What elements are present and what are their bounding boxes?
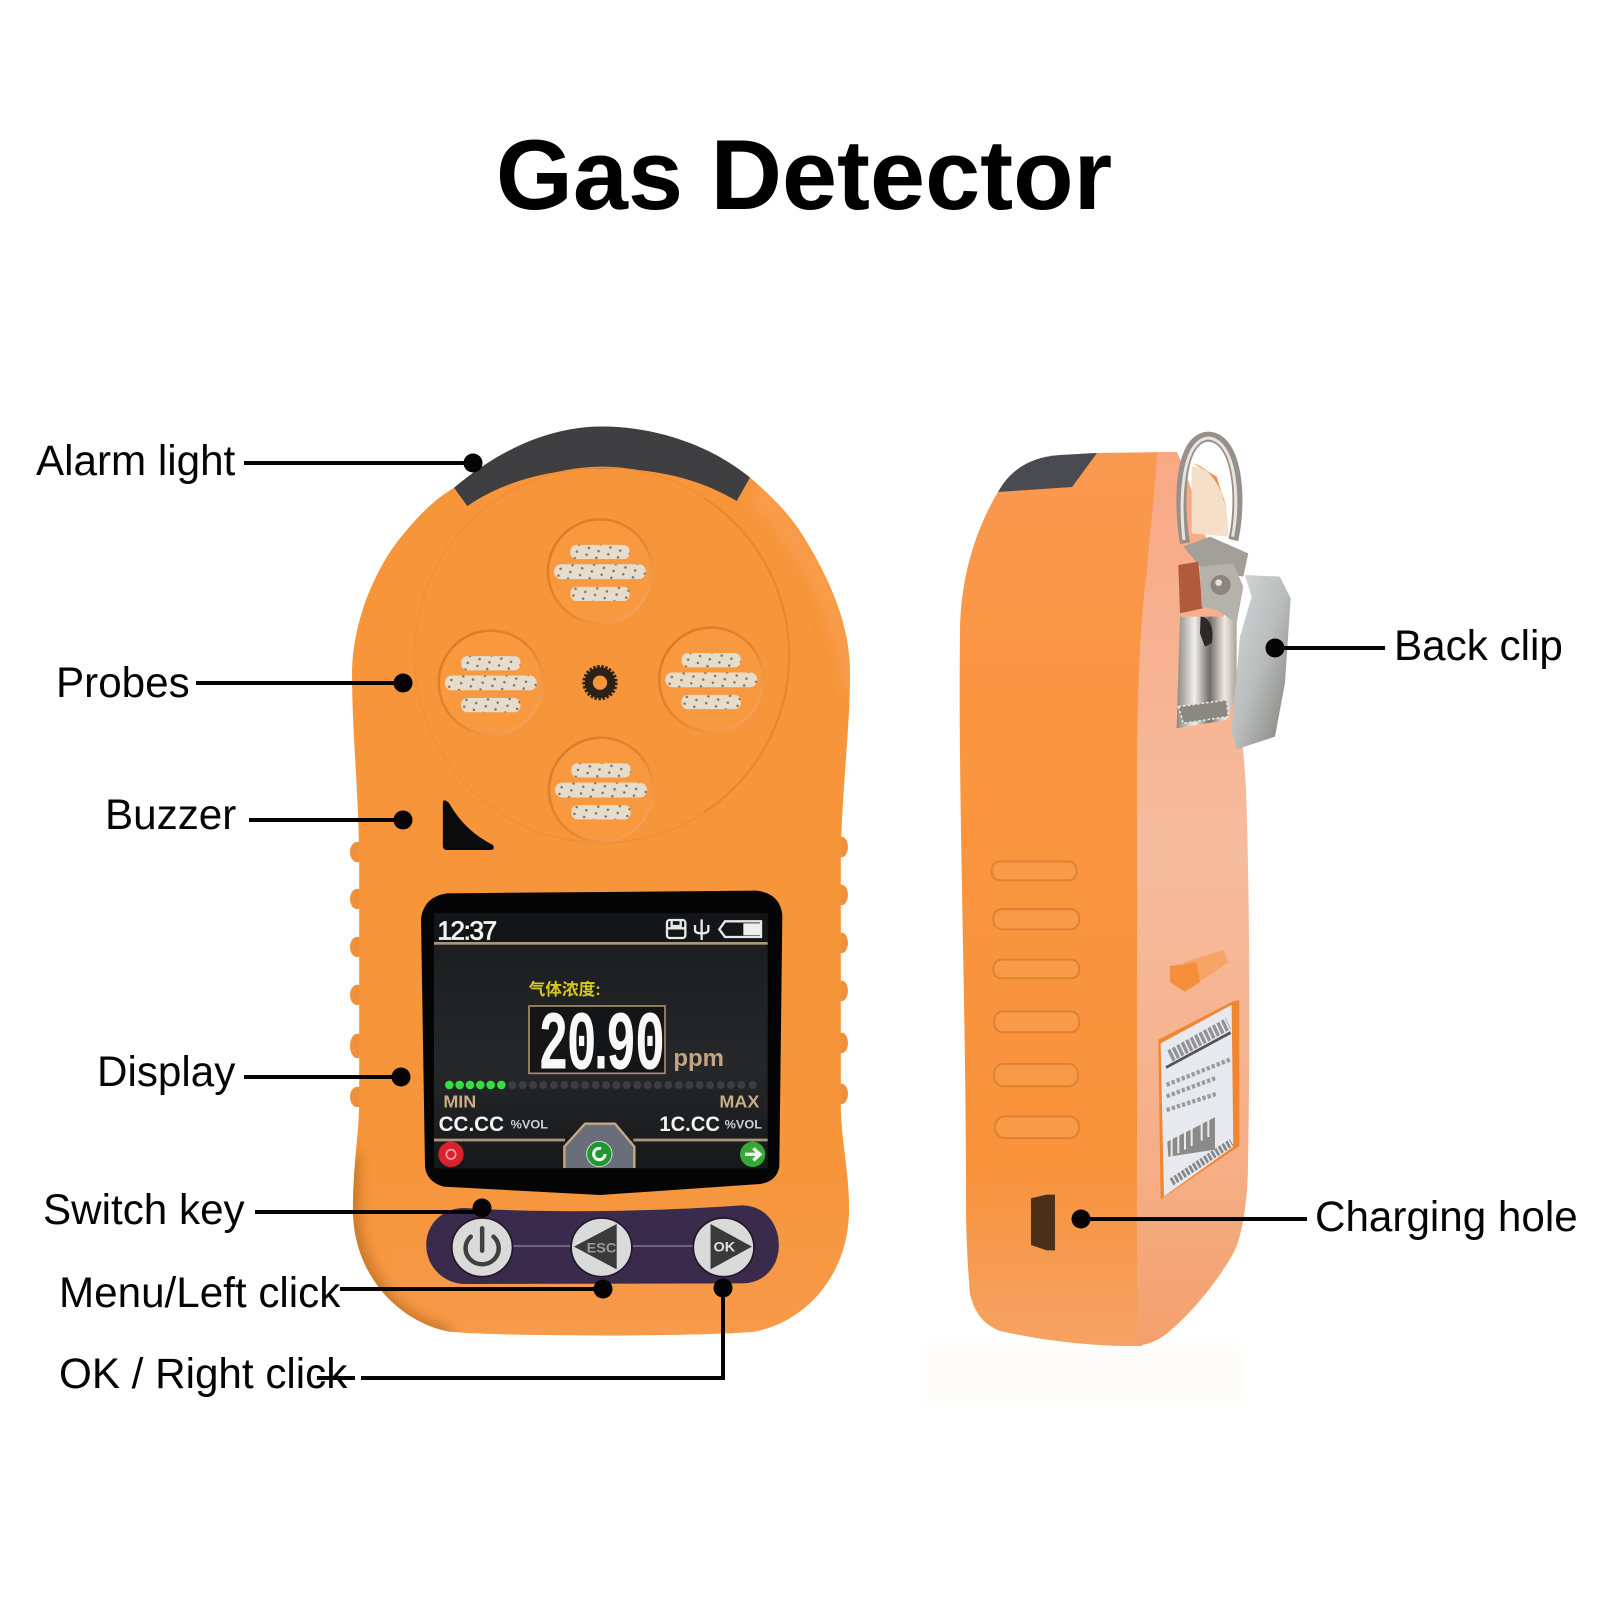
side details [992, 862, 1239, 1250]
callout: charging hole [1072, 1193, 1578, 1240]
callout: switch key: Switch key [43, 1186, 246, 1233]
clip teeth [1178, 700, 1228, 723]
clip hinge [1183, 537, 1248, 577]
esc key [571, 1218, 632, 1277]
orange side body [960, 452, 1170, 1346]
callout: ok right click [59, 1278, 732, 1397]
gas concentration label: 气体浓度: [529, 980, 601, 999]
side alarm band [998, 453, 1097, 492]
rating label [1158, 1000, 1239, 1199]
callout: alarm light: Alarm light [36, 437, 236, 484]
probe: top [548, 519, 652, 623]
brown strap [1178, 562, 1203, 613]
callout: buzzer [105, 791, 412, 838]
buzzer icon [443, 800, 494, 850]
status icons [667, 919, 761, 940]
clip back plate [1177, 617, 1237, 728]
clock: 12:37 [437, 915, 497, 945]
side peg [1170, 950, 1228, 992]
max unit: %VOL [725, 1118, 762, 1132]
power key [452, 1218, 512, 1277]
callout: display: Display [97, 1048, 236, 1095]
d-ring [1181, 437, 1237, 543]
bottom divider and tab [434, 1124, 768, 1168]
button panel [426, 1205, 779, 1284]
green refresh softkey [587, 1141, 612, 1167]
battery fill [743, 923, 760, 935]
rivet plate [1200, 563, 1243, 623]
ok key: OK [713, 1240, 736, 1255]
callout: probes [56, 659, 412, 706]
callout: charging hole: Charging hole [1315, 1193, 1578, 1240]
green arrow softkey [740, 1142, 765, 1167]
side view of gas detector [960, 437, 1291, 1346]
clip opening [1192, 466, 1228, 537]
level bar [445, 1081, 757, 1089]
display [421, 891, 782, 1195]
max label: MAX [719, 1091, 759, 1111]
title: Gas Detector [496, 119, 1112, 230]
front body in shared coordinates [350, 427, 853, 1335]
callout: display [97, 1048, 410, 1095]
front view of gas detector [350, 427, 853, 1335]
lcd panel [434, 913, 768, 1168]
ppm unit: ppm [673, 1045, 724, 1072]
callout: buzzer: Buzzer [105, 791, 236, 838]
side ribs [992, 862, 1079, 1138]
callout: back clip [1266, 622, 1563, 669]
probe: right [659, 628, 763, 732]
housing edge shading [351, 490, 853, 1335]
min unit: %VOL [511, 1118, 548, 1132]
key strip [426, 1205, 779, 1284]
side grip bumps [350, 837, 848, 1107]
callout: menu left click [59, 1269, 612, 1316]
gear sensor hole [584, 667, 616, 698]
esc key: ESC [587, 1241, 616, 1257]
red power softkey [438, 1142, 464, 1167]
clip slot [1200, 617, 1213, 647]
callout: alarm light [36, 437, 482, 484]
d-ring highlight [1182, 438, 1236, 540]
display bezel [421, 891, 782, 1195]
clip lever [1232, 575, 1291, 749]
ok key [693, 1218, 754, 1277]
peach back face [1137, 452, 1249, 1346]
probe: left [439, 631, 543, 735]
faint photo background patch [925, 1345, 1245, 1405]
min label: MIN [443, 1091, 476, 1111]
min value: CC.CC [439, 1112, 504, 1136]
connecting line [511, 1244, 699, 1248]
callout: back clip: Back clip [1394, 622, 1563, 669]
probe: bottom [549, 738, 653, 842]
callout: probes: Probes [56, 659, 190, 706]
charging port [1031, 1195, 1055, 1250]
status bar [434, 913, 768, 945]
belt clip [1177, 437, 1291, 749]
callout: switch key [43, 1186, 492, 1233]
orange housing [352, 427, 850, 1335]
alarm light band [454, 427, 750, 506]
callout: ok right click: OK / Right click [59, 1350, 348, 1397]
max value: 1C.CC [659, 1112, 720, 1136]
callout: menu left click: Menu/Left click [59, 1269, 341, 1316]
sensor plate outline [414, 467, 790, 843]
reading box: 20.90 [538, 999, 665, 1094]
